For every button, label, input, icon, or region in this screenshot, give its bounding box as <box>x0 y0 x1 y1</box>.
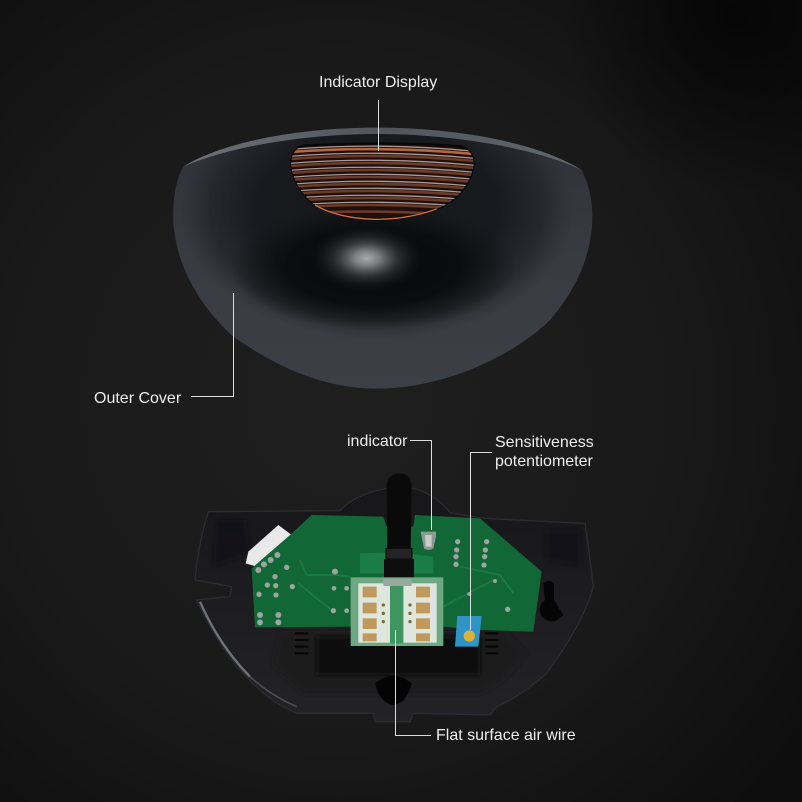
green board <box>252 515 542 632</box>
device: outer cover dome <box>173 128 592 389</box>
keyhole slot <box>540 581 563 621</box>
tray inner edges <box>213 520 582 567</box>
tray lower wall <box>273 633 527 693</box>
indicator grille <box>290 143 475 219</box>
label: Indicator Display <box>319 74 437 151</box>
dome shading <box>198 134 556 330</box>
cable strap <box>387 473 412 550</box>
label: Indicator Display: Indicator Display <box>319 74 437 91</box>
label: indicator <box>347 433 432 530</box>
label: indicator: indicator <box>347 433 408 450</box>
white connector <box>246 525 292 567</box>
dome top rim <box>183 128 582 170</box>
device: circuit board in tray <box>195 473 593 722</box>
antenna module <box>351 577 443 646</box>
dome body <box>173 128 592 389</box>
label: Outer Cover <box>94 293 234 407</box>
label: Sensitiveness potentiometer <box>470 434 594 630</box>
label: Sensitiveness potentiometer: Sensitiveness <box>495 434 594 451</box>
label: Flat surface air wire: Flat surface air wire <box>436 727 576 744</box>
tray <box>195 488 593 722</box>
label: Sensitiveness potentiometer: potentiometer <box>495 453 594 470</box>
ribbed clips <box>295 633 498 653</box>
mounting notch <box>375 676 412 705</box>
solder pads <box>255 539 510 625</box>
LED <box>421 532 436 550</box>
potentiometer <box>455 616 482 647</box>
tray rim highlight <box>200 602 250 677</box>
label: Outer Cover: Outer Cover <box>94 390 182 407</box>
board traces <box>298 553 513 612</box>
label: Flat surface air wire <box>396 630 576 744</box>
